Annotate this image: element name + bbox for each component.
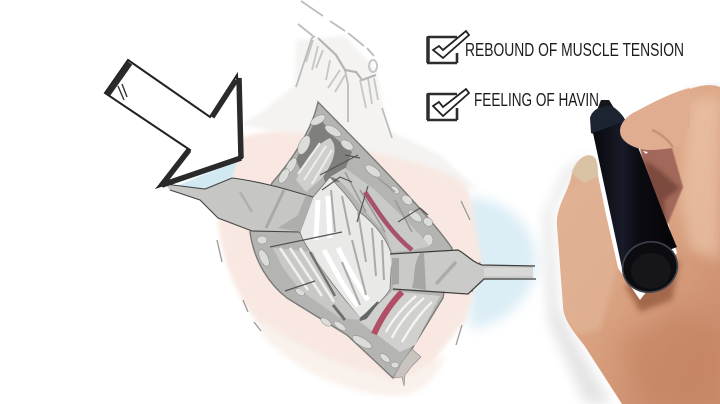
thumb tone bbox=[555, 170, 618, 335]
lower palm shade bbox=[625, 316, 710, 394]
marker barrel bbox=[593, 120, 677, 268]
wound: tissue base bbox=[250, 102, 452, 378]
wound: upper-left muscle bundle bbox=[296, 138, 335, 192]
wound: dark lines bbox=[270, 155, 428, 291]
index finger over marker bbox=[620, 88, 690, 150]
shadow under cap bbox=[625, 260, 680, 312]
right retractor bbox=[390, 250, 536, 294]
curled fingers bbox=[640, 148, 683, 224]
marker bbox=[590, 100, 683, 298]
wound: upper right band bbox=[330, 168, 430, 252]
hand shadow top bbox=[625, 84, 720, 125]
skin wash: blue right side bbox=[462, 198, 536, 330]
dashed incision guide bbox=[296, 1, 392, 138]
arrow thick edges bbox=[108, 63, 241, 186]
checklist item 2 bbox=[427, 89, 599, 120]
hand silhouette bbox=[557, 85, 720, 404]
wound: dark shadow by vessel bbox=[360, 302, 378, 320]
marker cap centre bbox=[631, 253, 671, 289]
skin contour strokes bbox=[217, 201, 480, 345]
wound: central white striped muscle bbox=[300, 177, 392, 318]
arrow body bbox=[105, 60, 242, 187]
wound: lower right fibres bbox=[360, 291, 440, 352]
large outline arrow bbox=[105, 60, 242, 187]
wound: white fibres bbox=[316, 196, 368, 306]
skin wash: pink surrounding skin bbox=[218, 131, 482, 392]
check mark 1 bbox=[433, 31, 469, 58]
wound: fat globules bbox=[257, 113, 435, 368]
back of hand highlight bbox=[680, 95, 720, 260]
red vessel lower bbox=[374, 292, 402, 334]
wound: lower right white strokes bbox=[386, 296, 432, 342]
white gap beside fingers bbox=[643, 151, 648, 154]
marker grip bbox=[590, 106, 626, 136]
marker tip bbox=[597, 100, 614, 110]
checklist item 1 bbox=[427, 31, 684, 63]
skin wash: grey upper tissue bbox=[240, 36, 478, 190]
thumb nail bbox=[572, 156, 598, 183]
wound: right band shading bbox=[345, 172, 412, 232]
checkbox 1 bbox=[427, 31, 469, 63]
item 2 text: FEELING OF HAVIN bbox=[474, 90, 599, 110]
checkbox 2 bbox=[427, 89, 469, 120]
curled finger dark folds bbox=[645, 160, 680, 222]
wound: dark upper shadows bbox=[296, 115, 352, 182]
red vessel upper bbox=[365, 192, 412, 250]
finger knuckle crease bbox=[652, 130, 673, 147]
skin wash: pale lower fringe bbox=[262, 320, 445, 396]
skin wash: blue left patch bbox=[172, 160, 238, 192]
upper tissue hatching bbox=[306, 38, 378, 108]
left retractor bbox=[165, 178, 313, 232]
hand shading bbox=[555, 95, 720, 404]
wound: lower-left fibres bbox=[273, 248, 362, 320]
arrow highlight ticks bbox=[118, 84, 127, 100]
small tissue tag at wound base bbox=[393, 349, 421, 386]
surgical illustration bbox=[165, 1, 536, 396]
marker end cap bbox=[617, 236, 683, 298]
check mark 2 bbox=[433, 89, 469, 116]
hand holding marker bbox=[544, 84, 720, 404]
wound: grey fibre shading bbox=[331, 190, 384, 305]
hand shadow bbox=[544, 150, 612, 404]
